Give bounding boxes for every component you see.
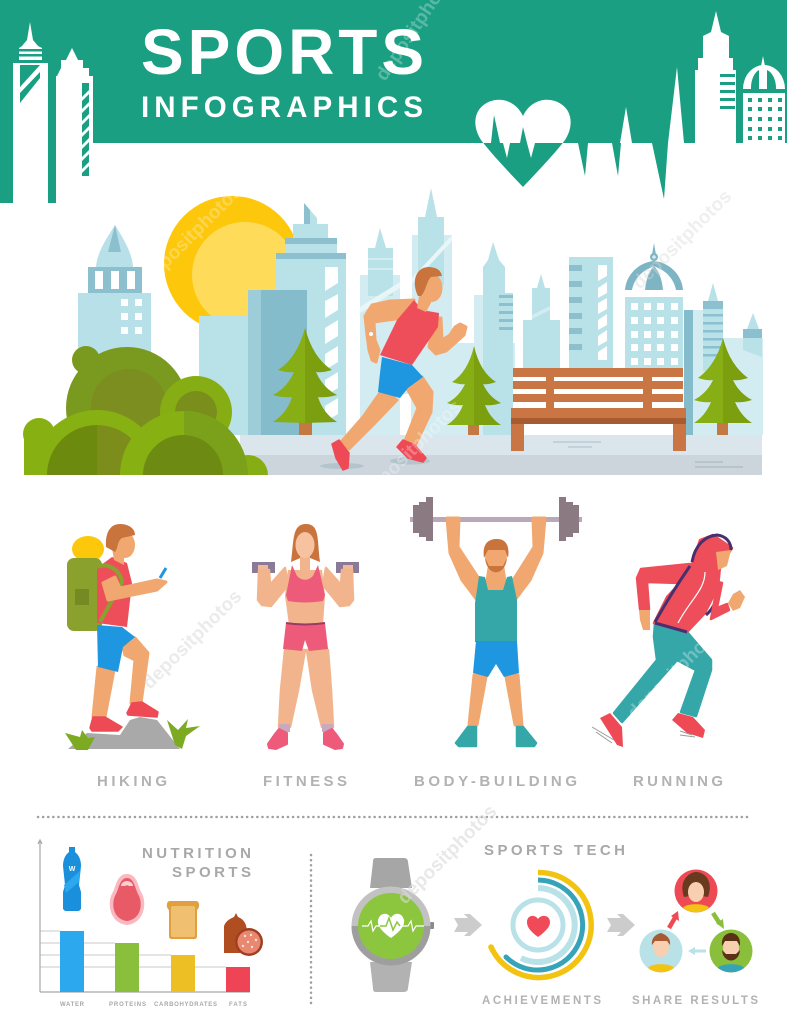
label: achievements: ACHIEVEMENTS	[482, 995, 601, 1007]
watermark text	[139, 0, 736, 909]
runner: back arm	[365, 300, 414, 362]
right domed building	[743, 56, 785, 143]
building: tall tower with windows	[276, 203, 346, 435]
dust	[592, 727, 695, 743]
watermark text: depositphotos	[359, 396, 466, 504]
building: front blocks	[199, 290, 307, 435]
building: pale spire tower	[400, 188, 515, 435]
torso	[285, 570, 325, 625]
standing leg	[93, 667, 114, 717]
shorts	[97, 625, 135, 672]
building: window tower	[569, 257, 613, 370]
tree: middle	[447, 346, 501, 435]
shoes	[268, 729, 343, 749]
arrow: share blue	[693, 950, 706, 952]
sports bra	[286, 565, 325, 602]
building: domed hall	[625, 243, 683, 370]
nutrition heading: NUTRITION	[142, 845, 251, 862]
building: domed tower left	[78, 225, 151, 363]
shorts	[473, 641, 519, 677]
arrow: share red	[669, 916, 676, 928]
backpack strap	[97, 565, 122, 622]
avatar: woman	[674, 870, 718, 912]
arrow head: red	[671, 911, 679, 921]
front hand	[728, 590, 745, 611]
shoes	[456, 727, 536, 746]
nutrition heading	[142, 845, 251, 881]
arms	[447, 518, 545, 600]
right skyline tower	[695, 11, 736, 143]
hoodie body	[654, 535, 732, 632]
hair	[106, 524, 135, 552]
chart: achievement rings	[488, 872, 591, 977]
sports tech heading: SPORTS TECH	[484, 842, 625, 859]
runner	[332, 267, 466, 470]
watermark text: depositphotos	[139, 586, 246, 694]
icon: meat	[110, 874, 144, 925]
runner: shoes	[332, 440, 426, 470]
hood trim	[655, 535, 731, 632]
sun	[164, 196, 300, 332]
bar labels: PROTEINS	[109, 1002, 146, 1008]
tree: left	[273, 328, 337, 435]
label: share results: SHARE RESULTS	[632, 995, 758, 1007]
runner: back leg	[342, 390, 397, 449]
grass	[65, 719, 200, 750]
barbell	[410, 497, 582, 541]
bar labels: WATER	[60, 1002, 85, 1008]
dumbbell: left	[252, 562, 275, 573]
figure: hiking	[65, 524, 200, 750]
runner: forward arm	[429, 318, 466, 354]
bar labels: CARBOHYDRATES	[154, 1002, 217, 1008]
backpack pocket	[75, 589, 89, 605]
hair and beard	[484, 539, 509, 572]
bar labels	[60, 1002, 247, 1008]
label: fitness: FITNESS	[263, 773, 347, 790]
icon: bread	[167, 901, 199, 939]
runner: torso	[380, 300, 439, 365]
figure: fitness	[252, 524, 359, 749]
watermark text: depositphotos	[624, 616, 731, 724]
runner: shorts	[378, 357, 423, 398]
runner: watch	[369, 332, 373, 336]
watermark text: depositphotos	[629, 186, 736, 294]
head	[485, 540, 507, 570]
shirt	[97, 557, 132, 627]
left skyline tower with stripes	[56, 48, 93, 203]
avatar: man right	[710, 930, 752, 972]
bushes	[23, 346, 268, 475]
heart with pulse	[475, 100, 571, 187]
zipper	[678, 572, 705, 623]
building: pale tower	[360, 228, 400, 435]
label: running: RUNNING	[633, 773, 723, 790]
runner: hair	[415, 267, 442, 296]
shorts	[283, 623, 328, 651]
neck	[112, 548, 124, 565]
backpack bedroll	[72, 536, 104, 562]
neck	[300, 555, 310, 571]
shoes	[600, 713, 705, 747]
nutrition panel	[38, 840, 263, 1008]
bar labels: FATS	[229, 1002, 247, 1008]
backpack	[67, 558, 102, 631]
building: stepped tower with bars	[474, 242, 513, 435]
nutrition heading: SPORTS	[172, 864, 251, 881]
header banner	[0, 0, 787, 203]
arrow head: blue	[688, 947, 695, 955]
shoes	[90, 702, 158, 731]
tank top	[475, 576, 517, 642]
right skyline pulse line	[578, 67, 684, 199]
pants	[614, 623, 711, 722]
watermark text: depositphotos	[394, 801, 501, 909]
arms	[258, 568, 353, 606]
icon: sausage	[224, 913, 263, 956]
park scene	[23, 188, 763, 475]
figure: running	[592, 535, 745, 747]
title: infographics: INFOGRAPHICS	[141, 91, 423, 124]
arrow: achievements to share	[607, 914, 635, 936]
legs	[279, 650, 333, 727]
icon: water bottle	[63, 847, 81, 911]
runner: head	[422, 274, 442, 302]
neck and chest	[484, 565, 508, 590]
label: hiking: HIKING	[97, 773, 167, 790]
arrow: watch to achievements	[454, 914, 482, 936]
arrow: share green	[713, 913, 720, 924]
figure: body-building	[410, 497, 582, 746]
icon: heart	[527, 916, 550, 937]
sports tech panel	[352, 842, 758, 1007]
left skyline tower	[13, 22, 48, 203]
icon: smart watch	[352, 858, 434, 992]
avatar: man left	[640, 930, 682, 972]
arrow head: green	[716, 919, 724, 929]
face	[296, 532, 314, 558]
building: small spire tower	[523, 274, 560, 368]
tree: right	[694, 338, 752, 435]
socks	[279, 724, 333, 732]
legs	[469, 675, 522, 725]
ground	[240, 435, 762, 475]
runner: neck and shoulder	[417, 290, 431, 312]
back hand	[639, 610, 650, 630]
runner: front leg	[405, 377, 432, 446]
raised leg	[123, 638, 148, 703]
building: far right towers	[684, 283, 763, 435]
front arm	[711, 582, 729, 619]
face	[716, 550, 731, 570]
arm	[103, 577, 166, 600]
watermark text: depositphotos	[139, 181, 246, 289]
bar chart	[38, 840, 250, 992]
dumbbell: right	[336, 562, 359, 573]
title: sports: SPORTS	[141, 16, 424, 88]
back arm	[637, 564, 690, 609]
icon: water bottle: W	[69, 866, 76, 873]
head	[115, 532, 135, 558]
phone	[160, 568, 166, 578]
hair	[291, 524, 320, 562]
bench	[511, 368, 686, 451]
rock	[68, 717, 180, 749]
label: body-building: BODY-BUILDING	[414, 773, 577, 790]
